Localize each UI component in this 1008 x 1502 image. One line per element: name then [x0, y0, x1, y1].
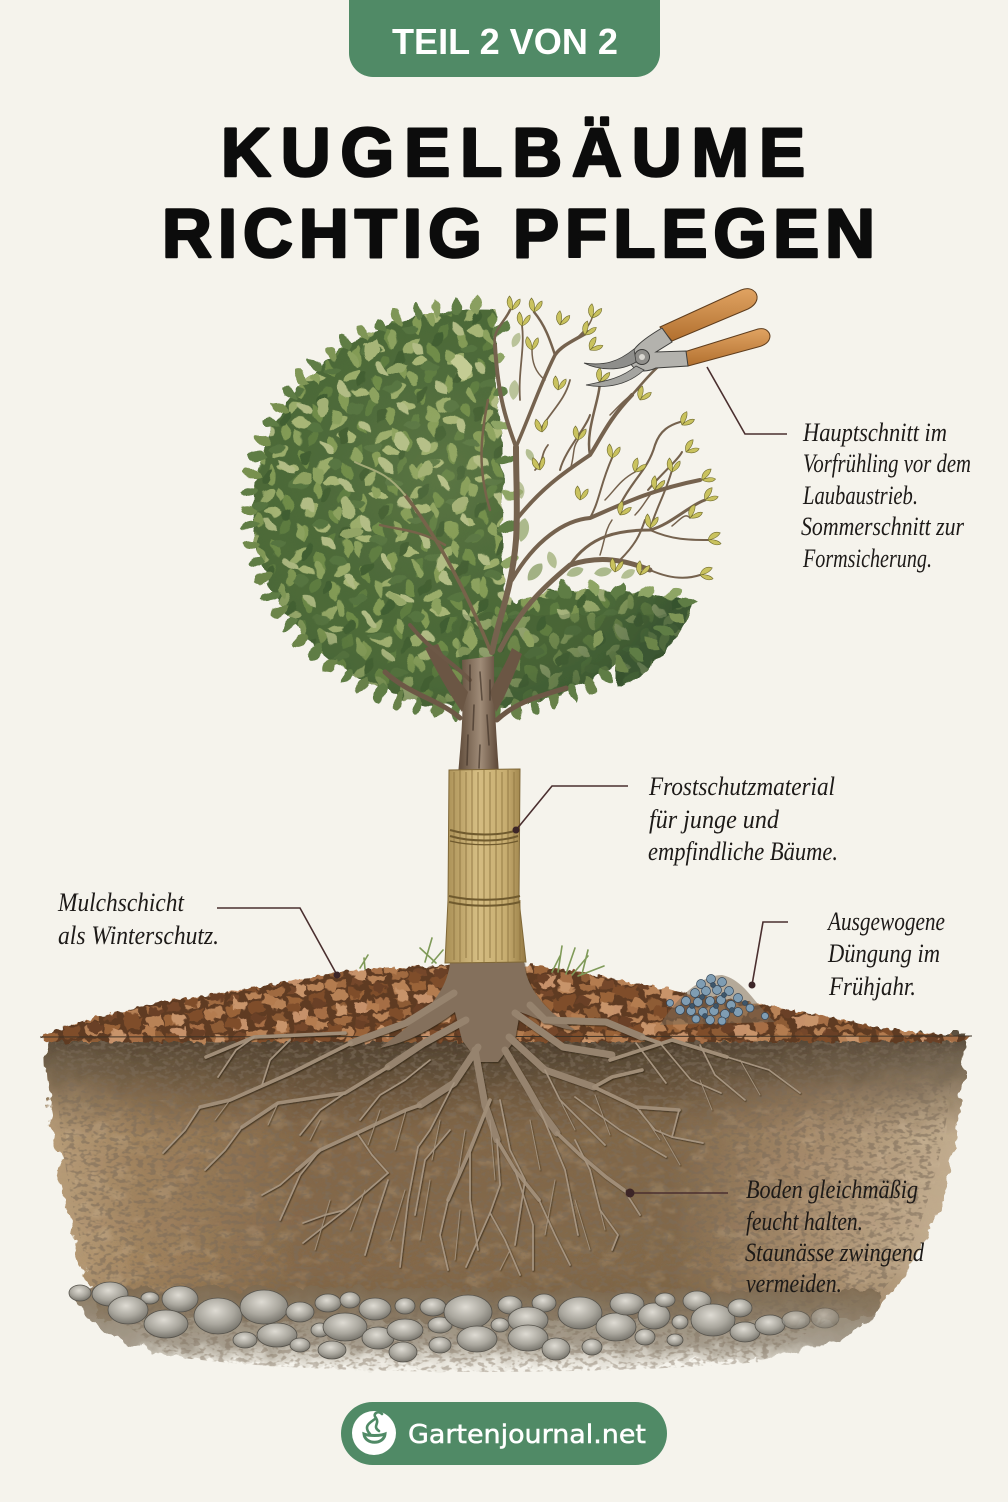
- metal head: [630, 328, 688, 371]
- label: soil moisture: feucht halten.: [746, 1207, 863, 1236]
- label: pruning: Laubaustrieb.: [802, 481, 918, 510]
- label: pruning: Formsicherung.: [802, 544, 932, 573]
- lower rope: [449, 896, 520, 906]
- mulch mound: [40, 965, 972, 1042]
- leader: fertiliser: [748, 922, 788, 988]
- root flare: [380, 962, 575, 1062]
- label: frost protection: für junge und: [649, 805, 780, 834]
- label: frost protection: empfindliche Bäume.: [648, 837, 838, 866]
- secateurs: [584, 289, 770, 386]
- leader: mulch: [217, 908, 340, 978]
- spring buds: [507, 296, 724, 583]
- upper handle: [660, 289, 757, 341]
- label: soil moisture: vermeiden.: [746, 1269, 842, 1298]
- leaves along crown edge: [239, 296, 698, 721]
- leader: pruning: [707, 367, 787, 434]
- label: mulch: als Winterschutz.: [58, 921, 219, 950]
- label: frost protection: [648, 772, 838, 866]
- title: [162, 114, 875, 272]
- label: soil moisture: [745, 1175, 925, 1298]
- grass tufts: [360, 938, 604, 976]
- label: fertiliser: [826, 907, 945, 1001]
- lower handle: [684, 329, 770, 366]
- soil cross-section: [46, 1034, 966, 1320]
- label: pruning: Vorfrühling vor dem: [803, 449, 971, 478]
- label: pruning: [801, 418, 971, 573]
- highlighted leaves: [292, 338, 606, 650]
- upper rope: [450, 830, 518, 845]
- label: fertiliser: Ausgewogene: [826, 907, 945, 936]
- sparse leaves in the cut-open side: [508, 331, 637, 584]
- thick roots: [351, 993, 642, 1140]
- gravel layer: [69, 1282, 880, 1372]
- medium roots: [200, 1033, 727, 1200]
- foliage half: [225, 290, 715, 726]
- label: pruning: Sommerschnitt zur: [801, 512, 965, 541]
- fertiliser pile: [660, 974, 775, 1025]
- title: RICHTIG PFLEGEN: [162, 195, 875, 272]
- label: pruning: Hauptschnitt im: [802, 418, 947, 447]
- fine roots: [163, 1037, 800, 1275]
- footer brand pill: Gartenjournal.net: [408, 1420, 646, 1450]
- trunk and lower limbs: [385, 625, 566, 775]
- label: soil moisture: Boden gleichmäßig: [746, 1175, 918, 1204]
- frost protection straw wrap: [445, 769, 526, 963]
- bare branches: [492, 310, 708, 652]
- badge: part indicator: [349, 0, 660, 77]
- footer brand pill: [341, 1402, 667, 1465]
- leader: frost protection: [512, 786, 628, 834]
- visible branches in foliage: [355, 400, 490, 650]
- label: mulch: [57, 888, 219, 950]
- label: soil moisture: Staunässe zwingend: [745, 1238, 925, 1267]
- root system: [163, 962, 800, 1275]
- icon: logo: [352, 1411, 396, 1455]
- blades: [584, 349, 636, 369]
- label: frost protection: Frostschutzmaterial: [648, 772, 835, 801]
- label: mulch: Mulchschicht: [57, 888, 185, 917]
- tree crown: [225, 290, 724, 726]
- label: fertiliser: Düngung im: [827, 939, 940, 968]
- title: KUGELBÄUME: [221, 114, 805, 191]
- hair roots: [215, 1060, 760, 1270]
- label: fertiliser: Frühjahr.: [828, 972, 916, 1001]
- badge: part indicator: TEIL 2 VON 2: [392, 21, 618, 62]
- leader: soil moisture: [626, 1188, 728, 1198]
